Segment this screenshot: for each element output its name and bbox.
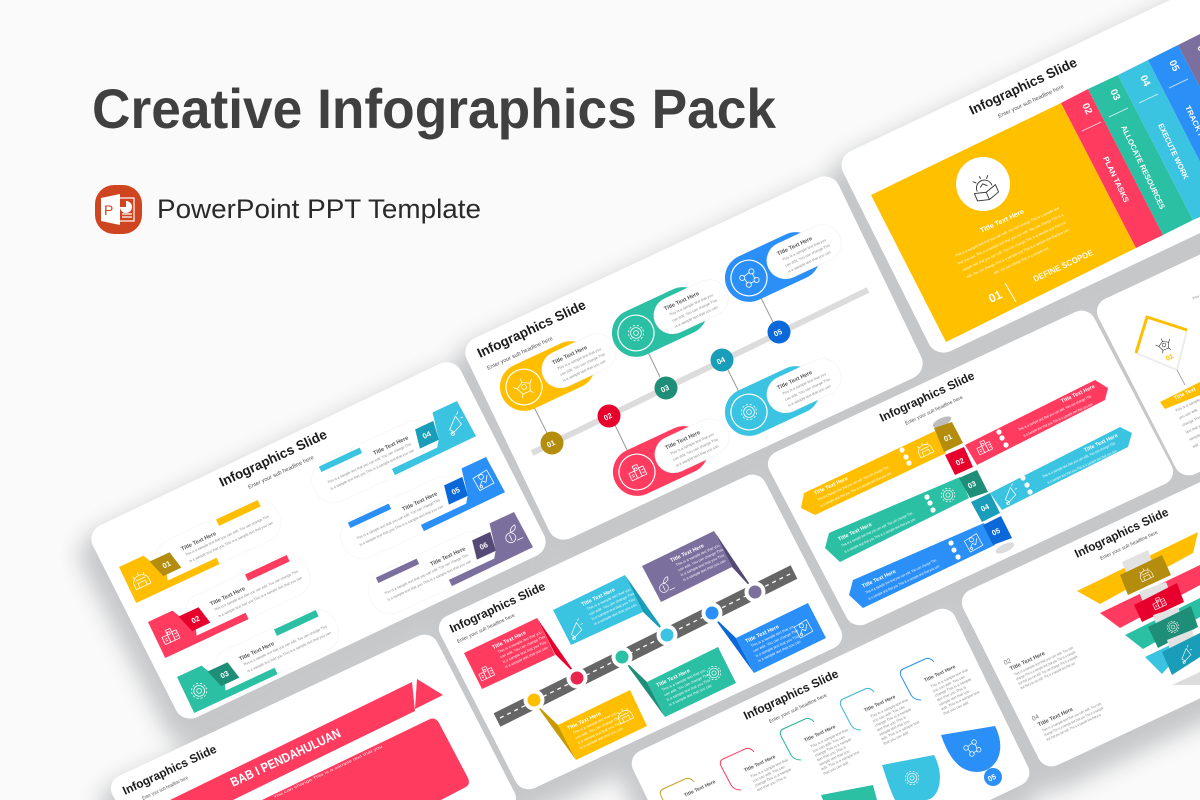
content text: This is a sample text that you can edit. You can change This is a sample text that you can edit. xyxy=(270,716,430,794)
pill 02: is a sample text that you can xyxy=(675,444,719,468)
card blue: This is a sample text that you xyxy=(750,624,795,648)
band blue: This is a sample text that you can edit. You can change This xyxy=(865,558,937,595)
band pink: This is a sample text that you can edit. You can change This xyxy=(1018,394,1092,432)
pill 05: is a sample text that you can xyxy=(787,250,831,274)
card yellow: This is a sample text that you xyxy=(572,711,617,735)
node 02: 02 xyxy=(602,411,614,423)
band green: is a sample text that you This is a sample text that you can xyxy=(844,517,916,554)
band blue: is a sample text that you This is a sample text that you can xyxy=(868,564,940,601)
step green: edit. This is a sample text xyxy=(821,750,860,771)
card green xyxy=(622,647,736,717)
slide card xyxy=(957,446,1200,771)
slide card xyxy=(763,306,1178,630)
panel: diamond slide xyxy=(1092,153,1200,480)
step cyan: you can edit. You can xyxy=(872,705,906,723)
slide card xyxy=(106,630,521,800)
step pink: text that you This is xyxy=(756,775,787,792)
step gold: Title Text Here xyxy=(683,779,717,799)
node 03 xyxy=(654,376,678,400)
step blue: This is a sample text that xyxy=(930,668,969,689)
stripe 06 xyxy=(1178,30,1200,190)
card cyan xyxy=(553,575,667,645)
heading: Infographics Slide xyxy=(217,427,330,490)
item 01: 01 xyxy=(161,559,172,570)
step green: Title Text Here xyxy=(803,724,837,744)
step pink: you can edit. You can xyxy=(752,765,786,783)
panel: timeline pills slide xyxy=(460,171,928,545)
card green: This is a sample text that you xyxy=(661,668,706,692)
stripe 02 xyxy=(1061,89,1163,248)
card blue xyxy=(712,603,826,673)
slide card xyxy=(627,604,1034,800)
pill 04: is a sample text that you can xyxy=(787,384,831,408)
text block 04: text that you can edit. This is a sample text that you xyxy=(1046,713,1102,742)
pill 03 xyxy=(604,269,737,365)
pill 03: is a sample text that you can xyxy=(674,305,718,329)
item 05: This is a sample text that you can edit. You can change This xyxy=(356,498,441,541)
pill 02: can edit. You can change This xyxy=(673,437,719,462)
pill 01: can edit. You can change This xyxy=(560,352,606,377)
stripe numbers: 04 xyxy=(1137,74,1152,89)
band blue: Title Text Here xyxy=(861,569,897,590)
card cyan: Title Text Here xyxy=(581,587,616,608)
step cyan xyxy=(840,688,922,747)
card blue: is a sample text that you can xyxy=(757,640,801,663)
band yellow xyxy=(801,431,946,515)
step blue: you can edit. You can xyxy=(932,675,966,693)
pill 03: can edit. You can change This xyxy=(672,298,718,323)
scope text: edit. You can change This is a sample text xyxy=(993,246,1049,275)
road xyxy=(497,572,794,720)
heading: Enter your sub headline here xyxy=(1099,530,1159,562)
funnel bands xyxy=(1077,532,1200,674)
item 04: Title Text Here xyxy=(373,435,410,457)
body text xyxy=(1175,398,1200,449)
content box xyxy=(262,719,469,800)
icon: PowerPoint logo xyxy=(95,185,142,234)
card yellow xyxy=(534,690,647,760)
cylinder column: 02 xyxy=(954,456,966,468)
stripe labels xyxy=(1101,104,1200,211)
card yellow: Title Text Here xyxy=(566,711,602,732)
pill 04: This is a sample text that you xyxy=(782,372,827,396)
step green: text that you This is xyxy=(816,745,847,762)
step blue: Title Text Here xyxy=(923,664,957,684)
band yellow: is a sample text that you This is a sample text that you can xyxy=(820,471,892,508)
item 06: is a sample text that you This is a sample text that you can xyxy=(387,559,472,602)
stripe numbers: 05 xyxy=(1166,59,1181,74)
item 05: Title Text Here xyxy=(402,491,439,513)
band pink xyxy=(965,380,1108,465)
item 04: This is a sample text that you can edit. You can change This xyxy=(327,442,412,485)
ribbon banner xyxy=(170,679,443,800)
text block 04: This is a sample text that you can edit. You can xyxy=(1041,702,1102,733)
card red: is a sample text that you This xyxy=(502,640,547,664)
band cyan: Title Text Here xyxy=(1083,433,1119,454)
text block 02 xyxy=(1003,631,1080,692)
step pink: change This is a sample xyxy=(754,767,792,788)
card green: can edit. You can change This xyxy=(664,673,710,697)
node 02 xyxy=(598,404,620,428)
card red: is a sample text that you can xyxy=(504,646,548,669)
node 04: 04 xyxy=(715,355,727,367)
step green: you can edit. You can xyxy=(812,735,846,753)
text block 04: change This is a sample text that you This is a sample xyxy=(1044,706,1104,737)
drop cyan xyxy=(882,755,940,800)
slide card xyxy=(836,0,1200,358)
stripe 04 xyxy=(1118,60,1200,220)
item 03: is a sample text that you This is a sample text that you can xyxy=(247,631,332,673)
slide card xyxy=(86,357,551,724)
diamond badge: 01 xyxy=(1165,353,1175,363)
funnel ground shadow xyxy=(1172,672,1200,685)
item 02: is a sample text that you This is a sample text that you can xyxy=(218,576,303,618)
step label: 01 xyxy=(986,287,1005,306)
pill 03: Title Text Here xyxy=(663,291,700,312)
card purple: is a sample text that you can xyxy=(682,559,726,582)
pill 01 xyxy=(492,323,625,419)
pill 03: This is a sample text that you xyxy=(669,293,714,317)
text block 04 xyxy=(1031,687,1106,744)
pill 05: can edit. You can change This xyxy=(785,243,831,268)
card purple: Title Text Here xyxy=(670,543,705,564)
heading: Infographics Slide xyxy=(877,368,977,425)
item 06: This is a sample text that you can edit. You can change This xyxy=(384,553,469,596)
item 01: Title Text Here xyxy=(180,531,217,553)
step cyan: text that you This is xyxy=(876,715,907,732)
band green: Title Text Here xyxy=(837,522,873,543)
text block 04: Title Text Here xyxy=(1037,707,1074,728)
cylinder column: 04 xyxy=(979,502,991,514)
step pink xyxy=(720,748,795,794)
item 06: 06 xyxy=(478,540,489,552)
band cyan xyxy=(990,427,1132,510)
text block 02: 02 xyxy=(1003,657,1013,667)
stripe numbers: 02 xyxy=(1079,102,1094,117)
item 03: Title Text Here xyxy=(238,641,275,663)
scope text xyxy=(948,194,1075,287)
heading: Enter your sub headline here xyxy=(904,395,964,427)
card yellow: is a sample text that you can xyxy=(579,727,623,750)
step green: sample text that you xyxy=(818,749,850,767)
step cyan: change This is a sample xyxy=(874,707,912,728)
band yellow: Title Text Here xyxy=(813,476,849,497)
item 01: This is a sample text that you can edit. You can change This xyxy=(185,514,270,557)
node 01: 01 xyxy=(545,438,557,450)
text block 02: Title Text Here xyxy=(1009,651,1046,672)
panel: drops slide xyxy=(627,604,1034,800)
step blue: edit. This is a sample text xyxy=(941,690,980,711)
heading: Infographics Slide xyxy=(967,55,1080,118)
band cyan: This is a sample text that you can edit. You can change This xyxy=(1042,441,1116,479)
step label: DEFINE SCOPOE xyxy=(1032,247,1095,284)
item 01: is a sample text that you This is a sample text that you can xyxy=(189,521,274,563)
step blue: sample text that you xyxy=(938,689,970,707)
pill 05: This is a sample text that you xyxy=(782,238,827,262)
cylinder column: 03 xyxy=(966,479,978,491)
heading: Enter your sub headline here xyxy=(247,455,315,491)
card cyan: is a sample text that you can xyxy=(593,603,637,626)
band pink: Title Text Here xyxy=(1060,384,1096,405)
panel: arrow bands slide xyxy=(763,306,1178,630)
text block 02: This is a sample text that you can edit. You can xyxy=(1013,646,1074,677)
heading: Infographics Slide xyxy=(1072,505,1171,561)
band green xyxy=(825,477,969,562)
pill 04: Title Text Here xyxy=(776,370,813,391)
card purple: can edit. You can change This xyxy=(678,548,724,572)
drop blue 05: 05 xyxy=(986,772,998,784)
node 01 xyxy=(540,432,564,454)
band green: This is a sample text that you can edit. You can change This xyxy=(841,511,913,548)
card cyan: is a sample text that you This xyxy=(591,597,636,621)
card cyan: This is a sample text that you xyxy=(586,587,631,611)
main title: Creative Infographics Pack xyxy=(92,77,777,140)
step cyan: sample text that you xyxy=(878,719,910,737)
card green: is a sample text that you can xyxy=(668,684,712,707)
drop blue 05 xyxy=(941,726,1002,786)
step green: that you can edit xyxy=(823,761,849,776)
stripe 05 xyxy=(1148,45,1200,207)
step blue: text that you This is xyxy=(936,685,967,702)
item 02: Title Text Here xyxy=(209,586,246,608)
step cyan: that you can edit xyxy=(883,731,909,746)
band pink: is a sample text that you This is a sample text that you can xyxy=(1023,402,1093,438)
pill 01: This is a sample text that you xyxy=(557,347,602,371)
text block 02: text that you can edit. You can change This is a sample xyxy=(1018,655,1078,686)
step blue: that you can edit xyxy=(943,701,969,716)
item 02: 02 xyxy=(190,614,201,625)
panel: chapter slide xyxy=(106,630,521,800)
item 05: is a sample text that you This is a sample text that you can xyxy=(359,504,444,547)
pill 02: This is a sample text that you xyxy=(670,432,715,456)
heading: Enter your sub headline here xyxy=(768,693,828,725)
stripe numbers xyxy=(1079,44,1200,117)
step cyan: This is a sample text that xyxy=(870,698,909,719)
item 05: 05 xyxy=(450,485,461,497)
heading: Infographics Slide xyxy=(447,579,548,636)
panel: define scope slide xyxy=(836,0,1200,358)
panel: folder tabs slide xyxy=(86,357,551,724)
item 03: 03 xyxy=(219,669,230,680)
pill 02: Title Text Here xyxy=(664,430,701,451)
text block 04: 04 xyxy=(1031,713,1041,723)
yellow label xyxy=(1160,382,1200,409)
ribbon banner: BAB I PENDAHULUAN xyxy=(228,725,343,790)
card red: can edit. You can change This xyxy=(500,635,546,659)
body text: This is a sample xyxy=(1175,398,1200,413)
timeline axis xyxy=(532,290,868,453)
card blue: is a sample text that you This xyxy=(755,634,800,658)
pill 05: Title Text Here xyxy=(776,236,813,257)
card blue: Title Text Here xyxy=(744,624,780,645)
step cyan: edit. This is a sample text xyxy=(881,720,920,741)
card purple: This is a sample text that you xyxy=(675,543,720,567)
node 05 xyxy=(768,320,790,344)
cylinder column xyxy=(931,414,1016,556)
card cyan: can edit. You can change This xyxy=(589,592,635,616)
item 03 xyxy=(175,603,346,713)
heading: Infographics Slide xyxy=(120,742,219,798)
funnel boxes xyxy=(1120,550,1200,675)
heading: Enter your sub headline here xyxy=(456,613,516,645)
step label xyxy=(986,247,1095,306)
stripe labels: EXECUTE WORK xyxy=(1156,122,1191,181)
item 04 xyxy=(305,398,477,509)
scope text: edit. You can change This is a sample text That is a sample text that you can xyxy=(966,228,1069,279)
card green: Title Text Here xyxy=(655,668,691,689)
scope text: that you can. This is a sample text that you can edit. You can change This is a xyxy=(957,213,1065,266)
stripe numbers: 03 xyxy=(1107,88,1122,103)
item 06 xyxy=(362,509,534,620)
text block 02: change This is a sample text that you This is a sample xyxy=(1016,650,1076,681)
node 03: 03 xyxy=(659,383,671,395)
card blue: can edit. You can change This xyxy=(753,629,799,653)
card green: is a sample text that you This xyxy=(666,678,711,702)
card red: Title Text Here xyxy=(492,630,527,651)
card purple xyxy=(642,531,755,602)
item 02: This is a sample text that you can edit. You can change This xyxy=(214,569,299,612)
pill 01: is a sample text that you can xyxy=(562,359,606,383)
card purple: is a sample text that you This xyxy=(680,553,725,577)
item 01 xyxy=(117,493,288,603)
pill 05 xyxy=(717,214,850,310)
diamond badge xyxy=(1136,317,1187,370)
step green: This is a sample text that xyxy=(810,728,849,749)
stripe dividers xyxy=(1082,79,1188,131)
heading: Enter your sub headline here xyxy=(997,84,1065,120)
yellow label: Title Text xyxy=(1173,387,1197,402)
text block 02: text that you can edit. This is a sample text that you xyxy=(1020,661,1076,690)
band cyan: is a sample text that you This is a sample text that you can xyxy=(1047,449,1117,485)
icon: PowerPoint logo: P xyxy=(104,202,113,218)
panel: funnel slide xyxy=(957,446,1200,771)
item 04: 04 xyxy=(421,429,433,441)
item 06: Title Text Here xyxy=(430,546,467,568)
step blue xyxy=(900,658,982,717)
step gold xyxy=(660,778,717,800)
cylinder column: 05 xyxy=(990,526,1002,538)
stripe labels: PLAN TASKS xyxy=(1101,155,1131,204)
content text: You can change This is a sample text that you xyxy=(273,745,383,799)
card red: This is a sample text that you xyxy=(497,630,542,654)
band blue xyxy=(849,523,995,608)
cylinder column: 01 xyxy=(942,432,954,444)
card yellow: is a sample text that you This xyxy=(577,721,622,745)
body text: you can edit. xyxy=(1178,408,1199,420)
pill 02 xyxy=(605,408,738,504)
panel: road slide xyxy=(434,470,847,794)
item 02 xyxy=(146,548,317,658)
step blue: change This is a sample xyxy=(934,677,972,698)
slide card xyxy=(460,171,928,545)
slide card xyxy=(434,470,847,794)
node 05: 05 xyxy=(772,327,784,339)
pill 04 xyxy=(717,348,850,444)
yellow main block xyxy=(871,103,1136,342)
stripe 03 xyxy=(1088,75,1193,235)
connectors xyxy=(533,296,773,452)
card red xyxy=(464,618,577,689)
node 04 xyxy=(710,348,734,372)
stripe labels: ALLOCATE RESOURCES xyxy=(1119,124,1167,211)
scope text: This is a sample text that you can edit. You can change This is a sample text xyxy=(955,206,1060,258)
item 03: This is a sample text that you can edit. You can change This xyxy=(243,624,328,667)
road nodes xyxy=(524,582,766,710)
slide card xyxy=(1092,153,1200,480)
item 05 xyxy=(334,454,506,565)
band yellow: This is a sample text that you can edit. You can change This xyxy=(817,465,889,502)
step pink: This is a sample text that xyxy=(750,758,789,779)
step pink: Title Text Here xyxy=(743,754,777,774)
scope text: Title Text Here xyxy=(979,208,1025,235)
subtitle: PowerPoint PPT Template xyxy=(157,194,481,224)
scope text: sample text that you can edit. You can change This is a sample text that you xyxy=(962,220,1067,272)
heading: Enter your sub headline here xyxy=(486,336,554,372)
connector xyxy=(1177,370,1185,385)
step green: change This is a sample xyxy=(814,737,852,758)
heading: Infographics Slide xyxy=(741,666,841,723)
pill 01: Title Text Here xyxy=(551,345,588,366)
drop green xyxy=(821,785,877,800)
icon: open book xyxy=(956,157,1010,211)
card yellow: can edit. You can change This xyxy=(575,716,621,740)
item 04: is a sample text that you This is a sample text that you can xyxy=(330,448,415,491)
pill 04: can edit. You can change This xyxy=(785,377,831,402)
step cyan: Title Text Here xyxy=(863,694,897,714)
heading: Infographics Slide xyxy=(475,297,589,361)
step green xyxy=(780,718,862,777)
